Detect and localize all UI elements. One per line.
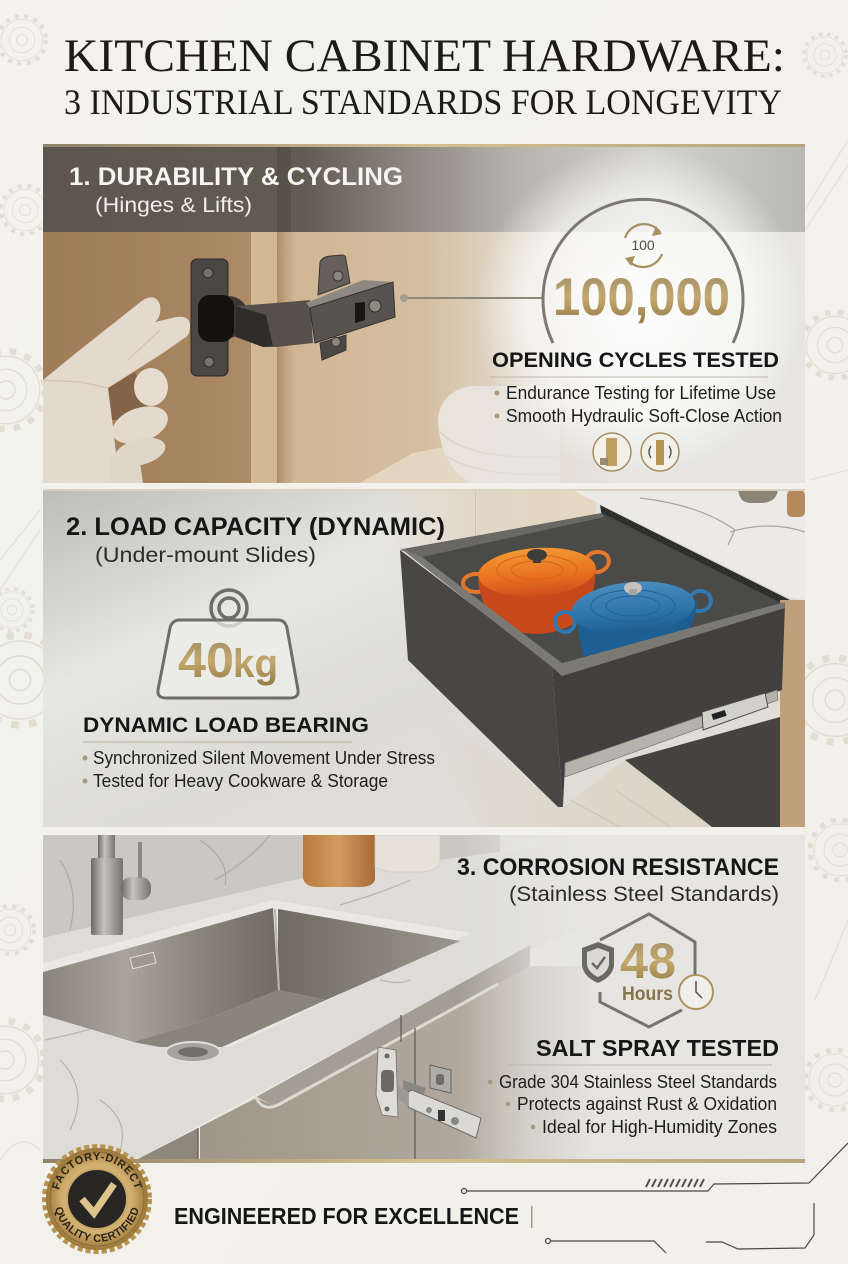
counter wood item bbox=[787, 490, 805, 517]
door gaps bbox=[198, 1015, 415, 1161]
silver fade bbox=[460, 835, 600, 1161]
bullet list: durability bbox=[494, 382, 782, 426]
ceramic dish bbox=[438, 386, 560, 483]
heading: durability: (Hinges & Lifts) bbox=[95, 194, 252, 217]
footer circuit lines bbox=[462, 1143, 848, 1253]
subheading: salt spray: SALT SPRAY TESTED bbox=[536, 1035, 779, 1061]
heading: load capacity bbox=[66, 513, 445, 567]
stainless hinge bbox=[376, 1047, 481, 1138]
cabinet fronts bbox=[135, 966, 600, 1161]
stat ring bbox=[543, 199, 743, 343]
factory-direct seal bbox=[42, 1144, 152, 1254]
rule panel 2 bbox=[43, 489, 805, 491]
metal slide bbox=[565, 690, 778, 777]
icon: 48 hours hexagon: 48 bbox=[620, 933, 676, 989]
heading: corrosion: (Stainless Steel Standards) bbox=[509, 883, 779, 906]
icon: cycle 100 bbox=[625, 224, 662, 267]
bullet list: load: Tested for Heavy Cookware & Storage bbox=[93, 770, 388, 791]
factory-direct seal: QUALITY CERTIFIED bbox=[54, 1207, 138, 1242]
heading: corrosion: 3. CORROSION RESISTANCE bbox=[457, 854, 779, 881]
icon: 40kg weight: kg bbox=[233, 642, 278, 686]
panel: durability and cycling bbox=[43, 145, 805, 483]
heading: corrosion bbox=[457, 854, 779, 906]
blue pot bbox=[553, 582, 713, 657]
drawer interior bbox=[403, 513, 785, 672]
under-counter recess bbox=[256, 945, 530, 1105]
faucet bbox=[91, 835, 151, 935]
heading: load capacity: 2. LOAD CAPACITY (DYNAMIC) bbox=[66, 513, 445, 541]
dark lower cabinet bbox=[625, 717, 780, 827]
under-counter handle bbox=[256, 984, 498, 1107]
panel: load capacity bbox=[43, 490, 805, 827]
title bbox=[64, 30, 785, 122]
bullet list: durability: Endurance Testing for Lifetime Use bbox=[506, 382, 776, 403]
wood door photo bbox=[43, 232, 584, 483]
icon: shield bbox=[582, 942, 614, 983]
hand shadow bbox=[108, 372, 150, 420]
upper wood cabinet bbox=[409, 491, 596, 561]
bullet list: corrosion: Grade 304 Stainless Steel Standards bbox=[499, 1071, 777, 1092]
bullet list: load bbox=[82, 747, 435, 791]
white crock bbox=[375, 835, 440, 872]
icon: cycle 100: 100 bbox=[631, 237, 655, 253]
stat: 100,000: 100,000 bbox=[553, 268, 730, 327]
footer tagline: ENGINEERED FOR EXCELLENCE bbox=[174, 1203, 519, 1229]
drawer left face bbox=[400, 550, 563, 807]
icon: endurance badge bbox=[593, 433, 631, 471]
icon: silent close badge bbox=[641, 433, 679, 471]
bullet list: corrosion: Ideal for High-Humidity Zones bbox=[542, 1116, 777, 1137]
sink drain bbox=[166, 1042, 220, 1062]
icon: soft-close hinge bbox=[191, 255, 395, 376]
dark header band bbox=[43, 145, 805, 232]
brushed steel background bbox=[43, 490, 805, 827]
brushed steel background bbox=[43, 835, 805, 1161]
heading: durability bbox=[69, 163, 403, 217]
connector line bbox=[400, 294, 542, 302]
subheading: dynamic load: DYNAMIC LOAD BEARING bbox=[83, 714, 369, 737]
gold rule panel 3 bbox=[43, 1159, 805, 1163]
fingers and palm bbox=[43, 297, 190, 483]
icon: 40kg weight: 40 bbox=[178, 634, 234, 688]
right wood panel bbox=[780, 600, 805, 827]
bullet list: load: Synchronized Silent Movement Under Stress bbox=[93, 747, 435, 768]
floor boards bbox=[526, 760, 712, 827]
icon: gloved hand bbox=[43, 297, 190, 483]
marble backsplash bbox=[43, 835, 500, 938]
factory-direct seal: FACTORY-DIRECT bbox=[52, 1152, 142, 1190]
icon: 40kg weight bbox=[158, 590, 298, 698]
title line 2: 3 INDUSTRIAL STANDARDS FOR LONGEVITY bbox=[64, 82, 782, 122]
icon: 48 hours hexagon: Hours bbox=[622, 984, 673, 1005]
drawer bbox=[400, 513, 785, 807]
icon: 48 hours hexagon bbox=[582, 914, 713, 1027]
marble worktop bbox=[572, 490, 805, 605]
panel: corrosion resistance bbox=[43, 835, 805, 1161]
sink overflow slot bbox=[130, 952, 156, 969]
drawer rims bbox=[400, 548, 785, 676]
title line 1: KITCHEN CABINET HARDWARE: bbox=[64, 30, 785, 82]
sink bbox=[43, 900, 471, 1075]
circular highlight bbox=[486, 158, 782, 452]
bullet list: corrosion: Protects against Rust & Oxidation bbox=[517, 1093, 777, 1114]
silver fade bbox=[444, 232, 620, 483]
drawer back rim bbox=[400, 513, 604, 557]
orange pot bbox=[463, 544, 611, 634]
drawer front face bbox=[552, 604, 785, 807]
bullet list: corrosion bbox=[488, 1071, 777, 1137]
icon: clock bbox=[679, 975, 713, 1009]
subheading: opening cycles: OPENING CYCLES TESTED bbox=[492, 349, 779, 372]
wooden crock bbox=[303, 835, 375, 887]
heading: durability: 1. DURABILITY & CYCLING bbox=[69, 163, 403, 191]
heading: load capacity: (Under-mount Slides) bbox=[95, 544, 316, 567]
counter canister bbox=[738, 490, 778, 503]
bullet list: durability: Smooth Hydraulic Soft-Close Action bbox=[506, 405, 782, 426]
gold rule panel 1 bbox=[43, 144, 805, 147]
marble counter bbox=[43, 840, 600, 1161]
